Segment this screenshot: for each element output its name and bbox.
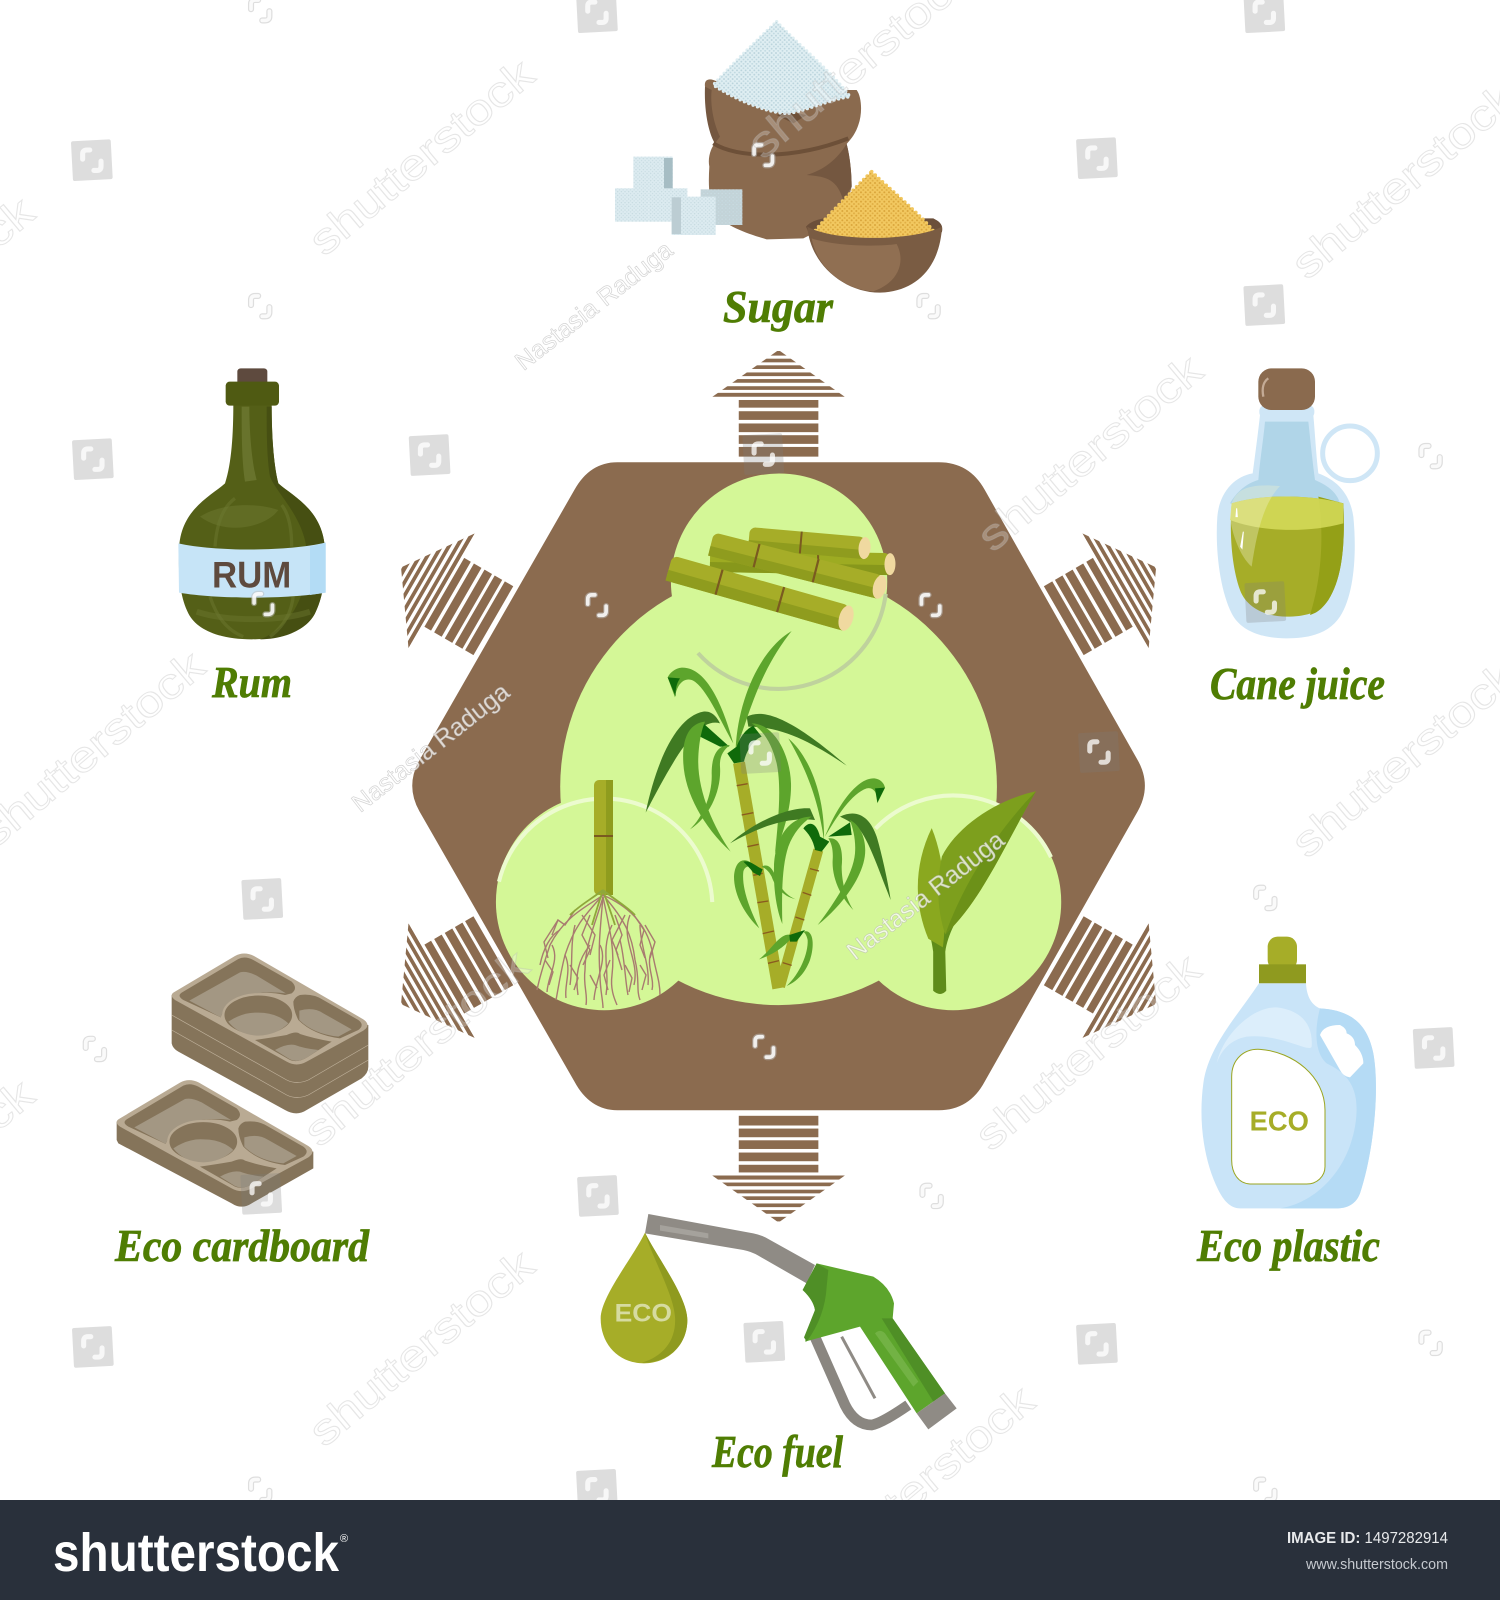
watermark layer: shutterstock <box>300 50 544 265</box>
icon: fuel drop and nozzle: ECO <box>615 1300 672 1328</box>
watermark layer: shutterstock <box>300 1240 544 1456</box>
icon: eco cardboard trays <box>117 953 368 1207</box>
label: Rum: Rum <box>211 658 292 707</box>
footer logo: shutterstock <box>53 1523 340 1583</box>
website url: www.shutterstock.com <box>1305 1556 1448 1573</box>
arrow to cane juice <box>1028 506 1191 683</box>
icon: rum bottle: RUM <box>212 553 291 595</box>
watermark layer: shutterstock <box>966 945 1210 1160</box>
image id: IMAGE ID: 1497282914 <box>1287 1530 1448 1547</box>
illustration: sugarcane plant <box>646 631 891 988</box>
watermark layer: shutterstock <box>968 346 1212 561</box>
illustration: sugarcane leaf shoot <box>918 791 1036 994</box>
watermark layer: Nastasia Raduga <box>347 678 515 818</box>
icon: cane juice bottle <box>1217 368 1377 638</box>
icon: eco plastic bottle: ECO <box>1250 1105 1309 1136</box>
icon: eco plastic bottle <box>1201 937 1376 1208</box>
arrow to sugar <box>707 351 850 457</box>
arrow to eco cardboard <box>366 889 529 1065</box>
illustration: cut sugarcane sticks <box>665 527 896 633</box>
label: Sugar: Sugar <box>723 281 834 332</box>
arrow to eco plastic <box>1028 889 1191 1065</box>
arrow to rum <box>366 506 529 683</box>
registered mark: ® <box>340 1533 348 1545</box>
watermark layer: shutterstock <box>1283 73 1500 289</box>
label: Eco fuel: Eco fuel <box>711 1426 843 1477</box>
illustration: sugarcane root <box>537 780 660 1008</box>
label: Eco plastic: Eco plastic <box>1196 1220 1380 1271</box>
light green trefoil background <box>496 473 1061 1010</box>
icon: sugar sack, cubes and bowl <box>615 22 942 293</box>
watermark layer: shutterstock <box>800 1376 1044 1592</box>
icon: fuel drop and nozzle <box>601 1214 957 1429</box>
label: Eco cardboard: Eco cardboard <box>114 1220 370 1271</box>
arrow to eco fuel <box>707 1116 850 1221</box>
watermark layer: Nastasia Raduga <box>510 236 678 376</box>
watermark layer: shutterstock <box>1283 652 1500 867</box>
label: Cane juice: Cane juice <box>1210 658 1385 709</box>
watermark layer: Nastasia Raduga <box>842 826 1010 966</box>
central hexagon panel <box>412 462 1145 1110</box>
footer bar <box>0 1500 1500 1600</box>
watermark layer: shutterstock <box>295 940 539 1156</box>
icon: rum bottle <box>178 368 326 639</box>
